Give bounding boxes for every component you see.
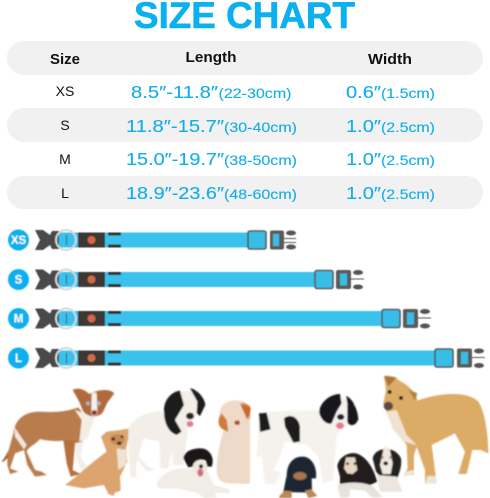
row L bbox=[7, 176, 483, 209]
dog: cavalier left bbox=[337, 453, 383, 497]
row M: (2.5cm) bbox=[381, 153, 435, 168]
collar L bbox=[8, 348, 485, 368]
dog: brown and white standing bbox=[2, 389, 114, 477]
table header row: Width bbox=[368, 51, 412, 68]
collar XS bbox=[8, 230, 296, 250]
dog: curly dog edge bbox=[240, 403, 251, 483]
collar L: L bbox=[15, 353, 22, 365]
dogs on the right bbox=[240, 376, 488, 498]
row S bbox=[7, 108, 483, 142]
row L: 18.9″-23.6″ bbox=[126, 183, 224, 203]
collar S: S bbox=[15, 275, 23, 287]
row XS: 0.6″ bbox=[346, 82, 381, 102]
row S: S bbox=[60, 117, 70, 133]
collar M bbox=[8, 308, 431, 329]
panel: group of dogs bbox=[2, 376, 488, 498]
row L: (48-60cm) bbox=[224, 187, 297, 202]
dog: white with black ears bbox=[128, 388, 205, 477]
panel: size table bbox=[7, 41, 483, 209]
dog: large golden bbox=[383, 376, 488, 484]
table header row: Length bbox=[186, 49, 236, 66]
collar XS: XS bbox=[11, 235, 26, 247]
panel: collar comparison bbox=[8, 230, 485, 368]
row L: 1.0″ bbox=[346, 183, 381, 203]
row S: (2.5cm) bbox=[381, 120, 435, 135]
row S: (30-40cm) bbox=[224, 120, 297, 135]
row M: 1.0″ bbox=[346, 149, 381, 169]
row L: (2.5cm) bbox=[381, 187, 435, 202]
row XS: 8.5″-11.8″ bbox=[131, 82, 218, 102]
table header row: Size bbox=[50, 51, 80, 68]
row M: 15.0″-19.7″ bbox=[126, 149, 224, 169]
row S: 11.8″-15.7″ bbox=[126, 116, 224, 136]
row XS: XS bbox=[56, 83, 74, 99]
dog: small tan sitting bbox=[65, 428, 129, 496]
table header row bbox=[7, 41, 483, 75]
dogs on the left bbox=[2, 388, 250, 498]
row M bbox=[59, 149, 435, 169]
collar S bbox=[8, 269, 364, 290]
dog: black and white spotted bbox=[256, 394, 358, 485]
row M: (38-50cm) bbox=[224, 153, 297, 168]
row XS: (22-30cm) bbox=[218, 86, 292, 101]
row XS: (1.5cm) bbox=[381, 86, 435, 101]
collar M: M bbox=[14, 314, 23, 326]
row S: 1.0″ bbox=[346, 116, 381, 136]
row XS bbox=[56, 82, 435, 102]
dog: small dachshund black and tan bbox=[279, 457, 317, 498]
row L: L bbox=[61, 185, 69, 201]
dog: black and white lying bbox=[157, 448, 230, 498]
dog: cavalier right bbox=[373, 447, 402, 492]
row M: M bbox=[59, 151, 71, 167]
dog: curly apricot and white bbox=[217, 400, 250, 483]
